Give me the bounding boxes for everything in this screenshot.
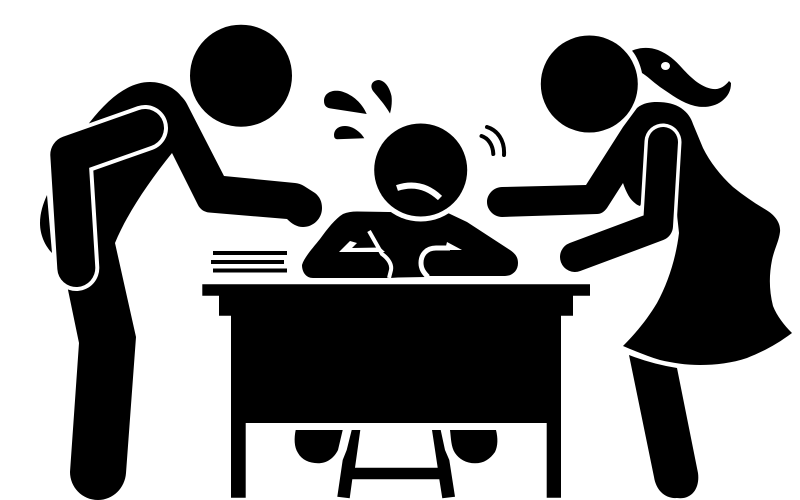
woman leg xyxy=(629,355,698,498)
desk xyxy=(202,284,590,498)
mouth xyxy=(397,186,440,198)
figure: man leaning over xyxy=(40,25,322,500)
woman head with gap xyxy=(537,32,641,136)
figure: crying student xyxy=(302,118,518,278)
chair xyxy=(337,430,455,498)
right arm outline xyxy=(421,242,462,277)
student knees xyxy=(295,430,497,463)
man near arm xyxy=(69,128,145,268)
figure: woman leaning over xyxy=(487,32,792,498)
stack of papers xyxy=(211,251,287,272)
sound waves xyxy=(482,127,504,155)
man body, far arm and leg xyxy=(60,82,322,500)
student head with gap xyxy=(369,118,472,222)
student torso and arms xyxy=(302,212,518,278)
left arm outline xyxy=(339,231,391,278)
man head xyxy=(190,25,292,127)
woman dress and far arm xyxy=(487,102,792,365)
woman near arm xyxy=(575,142,663,257)
man back xyxy=(40,195,52,253)
ponytail xyxy=(632,48,731,107)
sweat drops xyxy=(324,80,392,139)
